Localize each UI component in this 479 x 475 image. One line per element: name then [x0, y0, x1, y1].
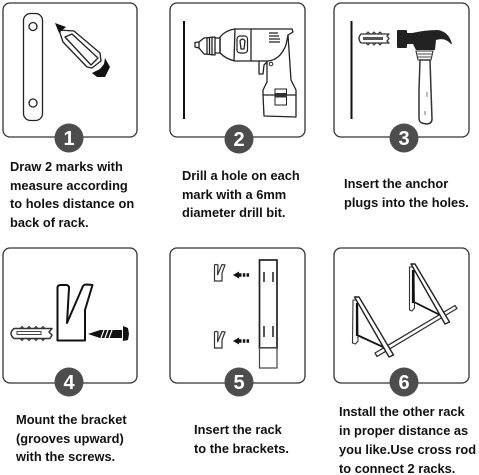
icon: bracket — [58, 284, 92, 340]
step number badge 3: 3 — [398, 128, 410, 150]
icon: hammer — [397, 30, 452, 124]
text: step 6: in proper distance as — [339, 423, 468, 438]
icon: lower small bracket — [214, 332, 225, 348]
text: step 1: to holes distance on — [10, 196, 134, 211]
text: step 3: Insert the anchor — [344, 176, 448, 191]
panel: step 6 — [334, 248, 469, 396]
icon: rack rail with two holes — [24, 14, 42, 120]
icon: wall line — [350, 21, 352, 119]
panel: step 1 — [3, 3, 137, 152]
step number badge 1: 1 — [63, 128, 75, 150]
panel: step 5 — [170, 248, 305, 396]
step number badge 6: 6 — [398, 372, 410, 394]
icon: cross rod — [375, 306, 457, 356]
text: step 4: (grooves upward) — [16, 431, 124, 446]
step number badge 4 — [54, 368, 84, 396]
icon: upper small bracket — [214, 264, 225, 281]
text: step 5: Insert the rack — [194, 422, 283, 437]
panel: step 4 — [3, 248, 137, 396]
panel: step 2 — [170, 3, 305, 154]
panel: step 3 — [334, 3, 469, 152]
step number badge 6 — [390, 368, 418, 396]
text: step 2: mark with a 6mm — [182, 187, 286, 202]
text: step 1: back of rack. — [10, 215, 89, 230]
icon: front bracket — [352, 297, 394, 357]
icon: anchor plug — [359, 32, 389, 45]
text: step 5: to the brackets. — [194, 441, 289, 456]
text: step 3: plugs into the holes. — [344, 195, 469, 210]
text: step 4: with the screws. — [15, 449, 115, 464]
text: step 2: Drill a hole on each — [182, 168, 300, 183]
icon: screw — [88, 326, 129, 341]
step number badge 5 — [224, 368, 254, 396]
icon: rear bracket — [410, 264, 450, 324]
icon: drill — [195, 29, 296, 117]
text: step 1: measure according — [10, 178, 128, 193]
icon: wall line — [183, 21, 185, 119]
step number badge 2 — [224, 124, 254, 154]
text: step 1: Draw 2 marks with — [10, 159, 123, 174]
text: step 4: Mount the bracket — [16, 412, 127, 427]
icon: lower arrow — [233, 338, 250, 344]
step number badge 1 — [54, 124, 84, 152]
step number badge 5: 5 — [233, 372, 245, 394]
icon: upper arrow — [233, 272, 250, 278]
icon: rack — [260, 260, 277, 368]
text: step 6: you like.Use cross rod — [339, 442, 476, 457]
step number badge 3 — [390, 124, 418, 152]
icon: anchor plug — [11, 326, 52, 340]
step number badge 2: 2 — [233, 129, 245, 151]
step number badge 4: 4 — [63, 372, 75, 394]
icon: pencil — [55, 23, 110, 77]
text: step 2: diameter drill bit. — [182, 205, 285, 220]
text: step 6: Install the other rack — [339, 404, 465, 419]
